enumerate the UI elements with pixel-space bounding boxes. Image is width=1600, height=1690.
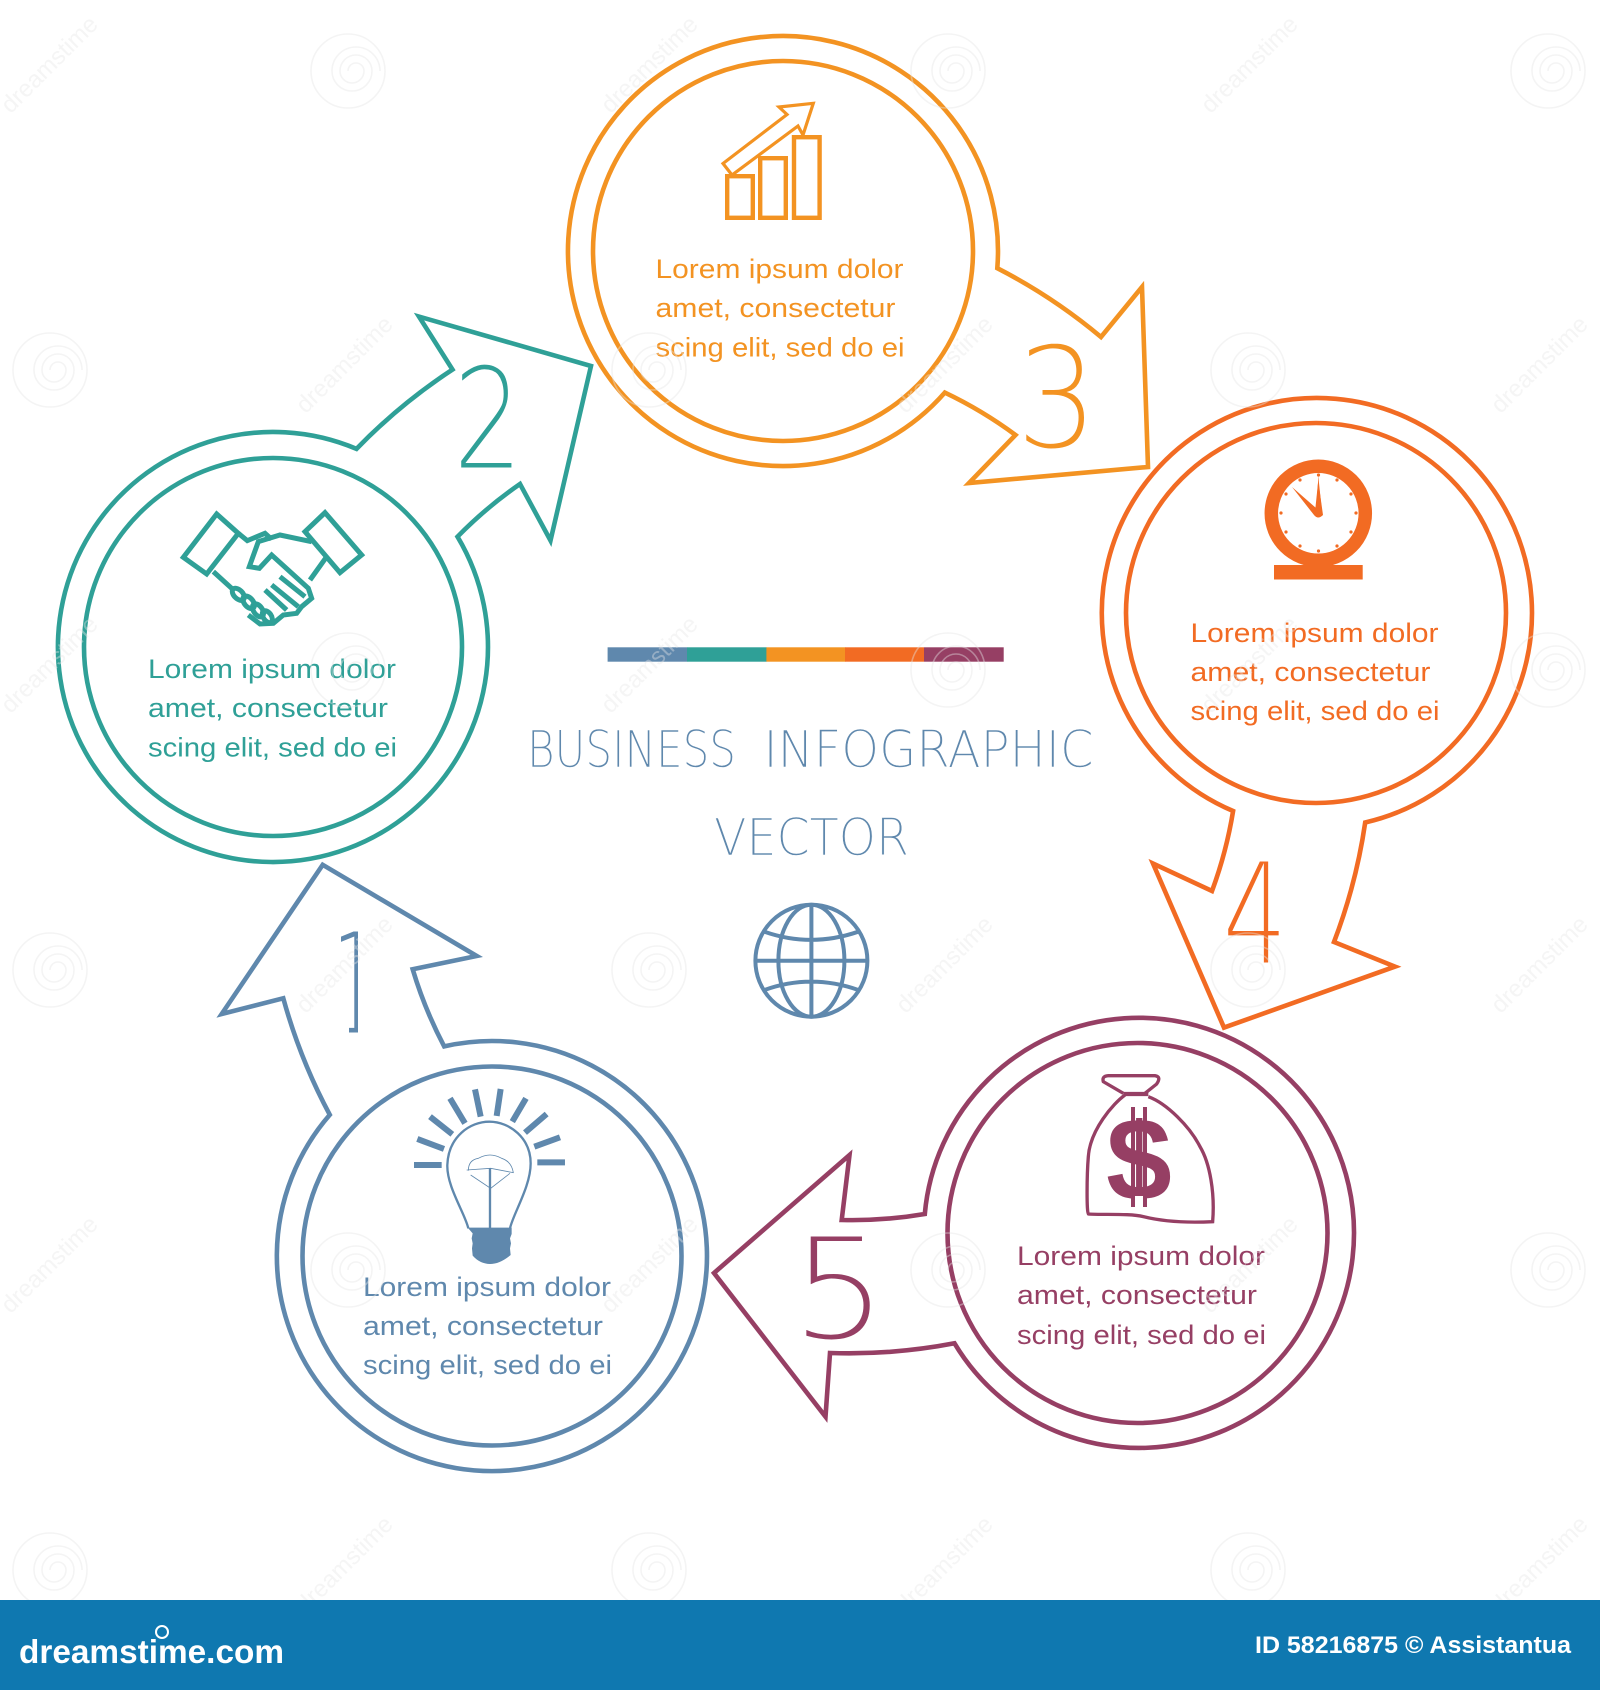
step number 4: 4: [1223, 833, 1287, 996]
text block 4: Lorem ipsum dolor: [1190, 618, 1439, 648]
circle and arrow 4 outline: [1102, 398, 1532, 1028]
icon: growth chart: [723, 103, 820, 218]
title: BUSINESS: [527, 721, 736, 780]
icon: money bag: $: [1106, 1094, 1172, 1226]
text block 4: [1190, 618, 1440, 726]
watermark pattern: dreamstime: [1486, 911, 1594, 1019]
circle and arrow 1 outline: [222, 865, 707, 1471]
watermark pattern: dreamstime: [596, 611, 704, 719]
icon: globe: [755, 905, 867, 1017]
step number 5: 5: [791, 1209, 887, 1372]
panel: step 5 purple money: [714, 1018, 1354, 1448]
text block 5: scing elit, sed do ei: [1017, 1320, 1266, 1350]
inner circle 5: [948, 1043, 1328, 1423]
text block 4: scing elit, sed do ei: [1190, 696, 1440, 726]
text block 1: scing elit, sed do ei: [363, 1350, 612, 1380]
watermark pattern: dreamstime: [291, 311, 399, 419]
text block 1: [363, 1272, 612, 1380]
text block 2: [148, 654, 397, 762]
text block 2: Lorem ipsum dolor: [148, 654, 396, 684]
watermark pattern: dreamstime: [1486, 311, 1594, 419]
circle and arrow 3 outline: [568, 36, 1148, 483]
watermark pattern: dreamstime: [1486, 1511, 1594, 1619]
watermark pattern: dreamstime: [1196, 611, 1304, 719]
step number 2: 2: [453, 338, 523, 501]
watermark pattern: dreamstime: [1196, 11, 1304, 119]
circle and arrow 2 outline: [58, 317, 591, 862]
watermark pattern: dreamstime: [596, 1211, 704, 1319]
watermark pattern: dreamstime: [1196, 1211, 1304, 1319]
inner circle 1: [302, 1066, 682, 1446]
text block 5: amet, consectetur: [1017, 1280, 1257, 1310]
text block 1: Lorem ipsum dolor: [363, 1272, 611, 1302]
text block 4: amet, consectetur: [1190, 657, 1431, 687]
inner circle 2: [84, 458, 462, 836]
footer credit: ID 58216875 © Assistantua: [1255, 1632, 1572, 1659]
footer banner: [0, 1600, 1600, 1690]
text block 3: amet, consectetur: [656, 293, 896, 323]
text block 3: Lorem ipsum dolor: [656, 254, 904, 284]
step number 1: 1: [310, 904, 400, 1067]
watermark pattern: dreamstime: [891, 311, 999, 419]
text block 1: amet, consectetur: [363, 1311, 603, 1341]
title: VECTOR: [714, 809, 909, 868]
panel: step 1 blue idea: [222, 865, 707, 1471]
footer logo: dreamstime.com: [19, 1633, 284, 1670]
icon: money bag: [1087, 1076, 1213, 1226]
panel: step 2 teal handshake: [58, 317, 591, 862]
text block 3: [656, 254, 904, 362]
text block 5: [1017, 1241, 1266, 1350]
watermark pattern: dreamstime: [596, 11, 704, 119]
icon: light bulb: [414, 1089, 565, 1264]
title: INFOGRAPHIC: [764, 721, 1094, 780]
icon: clock: [1271, 466, 1365, 580]
watermark pattern: dreamstime: [291, 911, 399, 1019]
watermark pattern: dreamstime: [891, 911, 999, 1019]
panel: step 4 red-orange clock: [1102, 398, 1532, 1028]
icon: handshake: [183, 513, 362, 624]
text block 3: scing elit, sed do ei: [656, 332, 904, 362]
watermark pattern: dreamstime: [891, 1511, 999, 1619]
text block 2: scing elit, sed do ei: [148, 732, 397, 762]
text block 5: Lorem ipsum dolor: [1017, 1241, 1265, 1271]
inner circle 4: [1126, 423, 1506, 803]
text block 2: amet, consectetur: [148, 693, 388, 723]
inner circle 3: [593, 61, 973, 441]
step number 3: 3: [1016, 317, 1098, 480]
circle and arrow 5 outline: [714, 1018, 1354, 1448]
colour bar: [608, 647, 1004, 662]
watermark pattern: dreamstime: [291, 1511, 399, 1619]
panel: step 3 orange chart: [568, 36, 1148, 483]
title: [527, 721, 1094, 868]
